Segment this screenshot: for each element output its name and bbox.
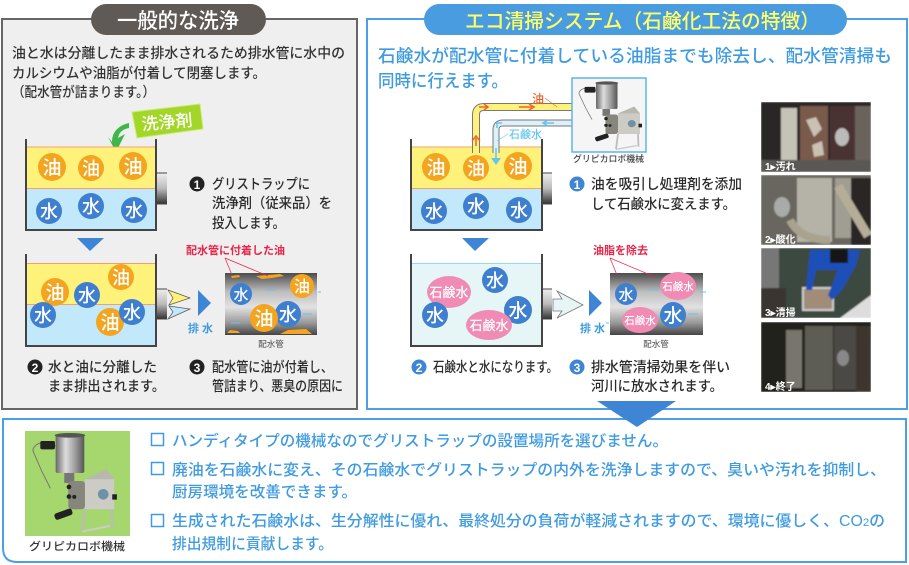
big arrow down: [597, 401, 676, 427]
intro text: カルシウムや油脂が付着して閉塞します。: [12, 65, 266, 81]
tank 3: [411, 139, 552, 230]
step 2 text: 水と油に分離した: [48, 359, 157, 375]
discharge arrows: 排水: [188, 321, 213, 335]
callout: grease removed: 油脂を除去: [593, 243, 648, 257]
clogged pipe: 油: [254, 308, 274, 330]
tank 3: 油: [426, 157, 446, 179]
tank 3: 水: [467, 197, 485, 217]
benefit 3: [152, 511, 885, 553]
tank 3: 水: [510, 201, 528, 221]
tank 4: 水: [486, 271, 504, 291]
tank 1: 水: [40, 202, 58, 222]
tank 1: [26, 139, 167, 230]
clean pipe: 水: [618, 287, 634, 304]
tank 1: 水: [82, 197, 100, 217]
heading: eco cleaning system: [424, 4, 847, 35]
tank 3: 水: [425, 202, 443, 222]
step 3 text: 配水管に油が付着し、: [212, 359, 333, 375]
step 1 text: 投入します。: [212, 215, 285, 231]
intro text: 同時に行えます。: [378, 71, 508, 91]
clean pipe: 石鹸水: [624, 314, 656, 327]
step 3 text: 河川に放水されます。: [591, 378, 723, 394]
tank 2: 油: [100, 312, 120, 334]
step 2 text: 2: [32, 361, 39, 375]
detergent label and arrow: 洗浄剤: [141, 111, 193, 134]
detergent label and arrow: [108, 104, 203, 152]
discharge arrow: [553, 290, 609, 335]
step 3 text: 排水管清掃効果を伴い: [591, 359, 730, 375]
callout: oil on pipe: [186, 243, 285, 276]
discharge arrows: [168, 290, 213, 335]
panel: eco cleaning system: [367, 4, 907, 409]
tank 4: [411, 254, 552, 346]
heading: conventional cleaning: [91, 4, 266, 35]
benefit 2: [152, 460, 886, 501]
step 1 text: 1: [194, 178, 201, 192]
intro text: [378, 46, 892, 91]
step 1 text: 洗浄剤（従来品）を: [212, 195, 332, 211]
step 3 text: 3: [194, 361, 201, 375]
discharge arrow: 排水: [580, 321, 605, 335]
oil and soap water pipes: 油: [532, 92, 544, 106]
step 2 text: 2: [416, 361, 423, 375]
callout: oil on pipe: 配水管に付着した油: [186, 243, 285, 257]
step 3 text: [190, 359, 343, 394]
tank 2: 油: [112, 268, 130, 288]
tank 3: 油: [467, 159, 485, 179]
tank 1: 油: [82, 159, 100, 179]
step 1 text: 1: [574, 178, 581, 192]
heading: eco cleaning system: エコ清掃システム（石鹸化工法の特徴）: [465, 10, 820, 33]
oil and soap water pipes: 石鹸水: [509, 127, 542, 141]
tank 1: 油: [123, 156, 143, 178]
tank 4: 水: [426, 306, 444, 326]
clogged pipe: 水: [233, 287, 249, 304]
clogged pipe: 水: [279, 305, 297, 325]
tank 3: 油: [508, 156, 528, 178]
machine photo: グリピカロボ機械: [573, 153, 644, 164]
intro text: 石鹸水が配水管に付着している油脂までも除去し、配水管清掃も: [378, 46, 892, 66]
clogged pipe: 油: [294, 278, 310, 296]
benefit 1: ハンディタイプの機械なのでグリストラップの設置場所を選びません。: [172, 431, 668, 450]
tank 2: 油: [45, 282, 65, 304]
clogged pipe: 配水管: [258, 339, 284, 349]
tank 2: 水: [123, 303, 141, 323]
tank 4: 水: [508, 300, 528, 322]
machine photo: グリピカロボ機械: [29, 539, 125, 553]
photo 2: liquefied: 2▸酸化: [765, 233, 796, 246]
intro text: [12, 45, 345, 100]
photo 1: dirty: [761, 102, 871, 173]
step 1 text: して石鹸水に変えます。: [591, 196, 736, 212]
clean pipe: 水: [663, 305, 683, 327]
photo 3: cleaning: 3▸清掃: [765, 306, 796, 319]
step 3 text: 3: [574, 361, 581, 375]
clean pipe: [610, 272, 706, 349]
benefit 3: 排出規制に貢献します。: [172, 535, 333, 553]
step 1 text: [190, 176, 332, 231]
panel: conventional cleaning: [2, 4, 357, 409]
arrow down: [462, 238, 489, 251]
tank 4: 石鹸水: [429, 285, 469, 300]
callout: grease removed: [593, 243, 655, 277]
intro text: 油と水は分離したまま排水されるため排水管に水中の: [12, 45, 345, 61]
photo 4: finished: 4▸終了: [765, 380, 796, 393]
tank 1: 水: [125, 201, 143, 221]
photo 1: dirty: 1▸汚れ: [765, 160, 796, 173]
tank 2: 水: [34, 306, 52, 326]
panel: benefits: [3, 401, 906, 562]
step 1 text: グリストラップに: [212, 176, 310, 192]
clogged pipe: [225, 273, 321, 349]
tank 1: 油: [42, 157, 62, 179]
oil and soap water pipes: [472, 92, 573, 165]
step 1 text: 油を吸引し処理剤を添加: [591, 176, 742, 192]
benefit 2: 廃油を石鹸水に変え、その石鹸水でグリストラップの内外を洗浄しますので、臭いや汚れを抑制し、: [172, 460, 886, 479]
clean pipe: 石鹸水: [662, 280, 694, 293]
tank 4: 石鹸水: [469, 318, 509, 333]
step 2 text: 石鹸水と水になります。: [433, 359, 558, 375]
benefit 3: 生成された石鹸水は、生分解性に優れ、最終処分の負荷が軽減されますので、環境に優しく、CO 2の: [172, 511, 885, 530]
step 2 text: まま排出されます。: [48, 378, 165, 394]
clean pipe: 配水管: [643, 339, 669, 349]
heading: conventional cleaning: 一般的な洗浄: [117, 10, 239, 33]
step 1 text: [570, 176, 742, 212]
machine photo: [25, 431, 130, 553]
photo 3: cleaning: [761, 248, 871, 319]
photo 4: finished: [761, 322, 871, 393]
machine photo: [572, 78, 646, 164]
intro text: （配水管が詰まります。）: [12, 84, 155, 100]
tank 2: [26, 254, 167, 346]
photo 2: liquefied: [761, 175, 871, 246]
step 3 text: [570, 359, 730, 394]
arrow down: [77, 238, 104, 251]
step 2 text: [28, 359, 165, 394]
tank 2: 水: [78, 286, 96, 306]
benefit 2: 厨房環境を改善できます。: [172, 483, 357, 501]
step 3 text: 管詰まり、悪臭の原因に: [212, 378, 343, 394]
